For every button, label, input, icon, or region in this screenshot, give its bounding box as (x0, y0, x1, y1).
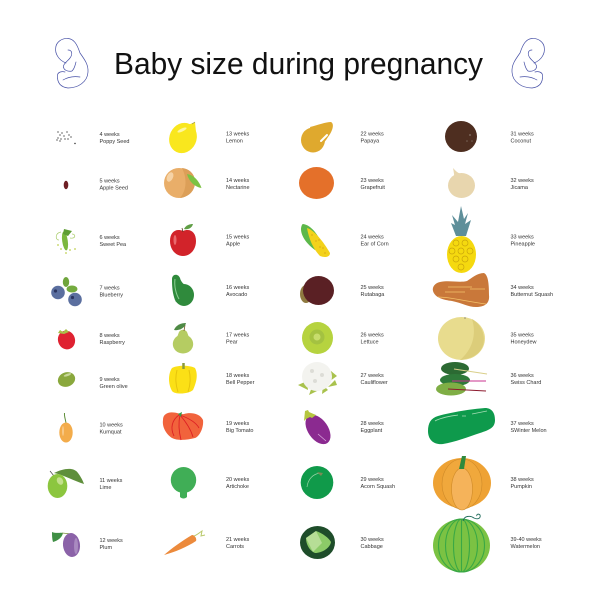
item: 17 weeks (173, 323, 249, 354)
label: 4 weeks (100, 132, 120, 138)
icon: kumquat (59, 413, 73, 442)
label: Artichoke (226, 484, 249, 490)
icon: avocado (172, 275, 194, 306)
label: Pineapple (510, 242, 535, 248)
label: 15 weeks (226, 234, 249, 240)
label: 11 weeks (100, 478, 123, 484)
item: 36 weeks (436, 362, 541, 396)
label: 24 weeks (360, 234, 384, 240)
label: 8 weeks (100, 333, 120, 339)
item: 6 weeks (56, 229, 127, 254)
label: 25 weeks (360, 285, 384, 291)
label: 20 weeks (226, 477, 249, 483)
item: 23 weeks (299, 167, 385, 199)
label: Blueberry (100, 292, 123, 298)
icon: jicama (448, 168, 475, 198)
label: Poppy Seed (100, 139, 129, 145)
icon: apple seed (64, 181, 68, 189)
item: 4 weeks (56, 131, 129, 145)
icon: bell pepper (169, 363, 197, 394)
label: Lettuce (360, 340, 379, 346)
icon: plum (52, 532, 81, 558)
item: 22 weeks (301, 122, 384, 152)
label: Jicama (510, 185, 529, 191)
icon: poppy seed (56, 131, 76, 144)
item: 26 weeks (302, 322, 384, 354)
icon: watermelon (433, 514, 490, 572)
icon: coconut (445, 121, 477, 152)
icon: lemon (164, 118, 202, 158)
icon: papaya (301, 122, 333, 152)
icon: sweet pea (56, 229, 76, 254)
item: 27 weeks (298, 362, 388, 395)
item: 14 weeks (164, 168, 250, 198)
title: Baby size during pregnancy (114, 46, 483, 81)
item: 29 weeks (301, 466, 395, 499)
item: 31 weeks (445, 121, 534, 152)
label: 7 weeks (100, 286, 120, 292)
label: Honeydew (510, 340, 537, 346)
label: Cabbage (360, 544, 383, 550)
icon: artichoke (171, 467, 196, 498)
icon: nectarine (164, 168, 202, 198)
icon: butternut squash (433, 273, 489, 307)
label: Apple (226, 242, 240, 248)
item: 25 weeks (300, 276, 385, 305)
icon: grapefruit (299, 167, 334, 199)
icon: raspberry (55, 328, 78, 352)
item: 32 weeks (448, 168, 534, 198)
label: Papaya (360, 138, 380, 144)
label: Kumquat (100, 430, 122, 436)
label: 29 weeks (360, 477, 384, 483)
item: 34 weeks (433, 273, 553, 307)
label: 26 weeks (360, 332, 384, 338)
label: 32 weeks (510, 178, 534, 184)
item: 11 weeks (48, 469, 123, 498)
label: Bell Pepper (226, 380, 255, 386)
icon: lettuce (302, 322, 333, 354)
label: Eggplant (360, 428, 383, 434)
icon: pear (173, 323, 193, 354)
label: Coconut (510, 138, 531, 144)
label: Plum (100, 545, 112, 551)
label: Carrots (226, 544, 244, 550)
label: 9 weeks (100, 377, 120, 383)
label: Sweet Pea (100, 242, 127, 248)
icon: swiss chard (436, 362, 487, 396)
label: 14 weeks (226, 178, 249, 184)
label: 33 weeks (510, 234, 534, 240)
label: Green olive (100, 384, 128, 390)
label: 18 weeks (226, 373, 249, 379)
label: Pear (226, 340, 238, 346)
icon: honeydew (438, 317, 485, 360)
icon: rutabaga (300, 276, 334, 305)
label: 10 weeks (100, 422, 123, 428)
icon: lime (48, 469, 84, 498)
icon: pineapple (447, 206, 476, 273)
label: 36 weeks (510, 373, 534, 379)
icon: green olive (56, 370, 77, 389)
icon: winter melon (428, 408, 495, 444)
icon: blueberry (51, 277, 82, 306)
item: 38 weeks (433, 456, 534, 510)
item: 37 weeks (428, 408, 547, 444)
label: 38 weeks (510, 477, 534, 483)
label: 30 weeks (360, 537, 384, 543)
item: 9 weeks (56, 370, 128, 390)
label: Avocado (226, 292, 247, 298)
label: 37 weeks (510, 421, 534, 427)
label: 17 weeks (226, 332, 249, 338)
label: Acorn Squash (360, 484, 395, 490)
label: 6 weeks (100, 235, 120, 241)
label: Lemon (226, 138, 243, 144)
item: 15 weeks (170, 224, 249, 256)
icon: apple (170, 224, 196, 256)
item: 39-40 weeks (433, 514, 542, 572)
label: Big Tomato (226, 428, 253, 434)
item: 10 weeks (59, 413, 123, 442)
label: 19 weeks (226, 421, 249, 427)
label: Nectarine (226, 185, 250, 191)
item: 8 weeks (55, 328, 125, 352)
label: Swiss Chard (510, 380, 541, 386)
label: SWinter Melon (510, 428, 547, 434)
label: 28 weeks (360, 421, 384, 427)
label: 16 weeks (226, 285, 249, 291)
item: 16 weeks (172, 275, 249, 306)
label: 21 weeks (226, 537, 249, 543)
item: 33 weeks (447, 206, 535, 273)
label: 5 weeks (100, 178, 120, 184)
label: Rutabaga (360, 292, 385, 298)
label: Raspberry (100, 340, 125, 346)
icon: cabbage (300, 526, 335, 559)
icon: ear of corn (301, 224, 330, 257)
icon: pumpkin (433, 456, 491, 510)
label: Pumpkin (510, 484, 532, 490)
label: Grapefruit (360, 185, 385, 191)
label: Apple Seed (100, 186, 128, 192)
label: 13 weeks (226, 132, 249, 138)
icon: eggplant (300, 410, 336, 449)
label: 31 weeks (510, 132, 534, 138)
label: 35 weeks (510, 332, 534, 338)
label: Lime (100, 485, 111, 491)
label: Butternut Squash (510, 292, 553, 298)
item: 20 weeks (171, 467, 249, 498)
label: 39-40 weeks (510, 537, 542, 543)
icon: big tomato (163, 412, 203, 440)
label: Watermelon (510, 544, 540, 550)
label: 34 weeks (510, 285, 534, 291)
label: 22 weeks (360, 132, 384, 138)
item: 19 weeks (163, 412, 253, 440)
item: 21 weeks (164, 531, 249, 555)
item: 30 weeks (300, 526, 384, 559)
label: Ear of Corn (360, 242, 389, 248)
item: 7 weeks (51, 277, 123, 306)
label: 12 weeks (100, 538, 123, 544)
item: 28 weeks (300, 410, 384, 449)
item: 13 weeks (164, 118, 249, 158)
label: Cauliflower (360, 380, 388, 386)
item: 24 weeks (301, 224, 389, 257)
icon: acorn squash (301, 466, 333, 499)
icon: cauliflower (298, 362, 337, 395)
icon: carrot (164, 531, 205, 555)
item: 18 weeks (169, 363, 255, 394)
item: 35 weeks (438, 317, 537, 360)
label: 27 weeks (360, 373, 384, 379)
item: 5 weeks (64, 178, 128, 192)
icon: fetus left (56, 38, 88, 88)
item: 12 weeks (52, 532, 123, 558)
icon: fetus right (512, 38, 544, 88)
label: 23 weeks (360, 178, 384, 184)
